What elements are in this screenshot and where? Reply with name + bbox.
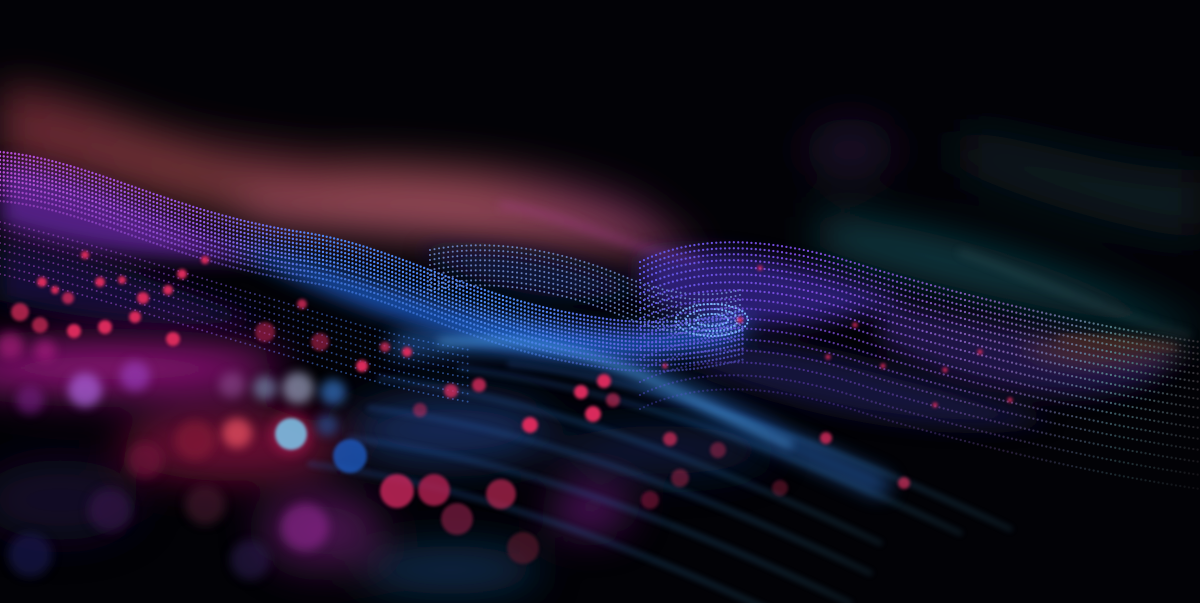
magenta rim beneath haze — [500, 205, 700, 262]
dotted mesh: swirl — [676, 304, 748, 336]
lower-left soft glow — [0, 342, 770, 594]
dotted mesh: below left crest — [0, 222, 470, 402]
dotted mesh: dark hump — [430, 245, 740, 334]
lower streaks — [310, 364, 1010, 603]
dotted mesh: upper left crest — [0, 152, 745, 371]
small pink particles — [11, 251, 1012, 509]
glowing blue ribbon — [400, 341, 880, 485]
soft wave body — [0, 165, 1190, 426]
dotted mesh: right slope — [640, 242, 1200, 489]
orange rim at right edge of wave — [960, 252, 1190, 348]
teal haze at right — [805, 118, 1200, 340]
bokeh lights — [0, 332, 539, 580]
red haze above the wave — [0, 85, 700, 262]
